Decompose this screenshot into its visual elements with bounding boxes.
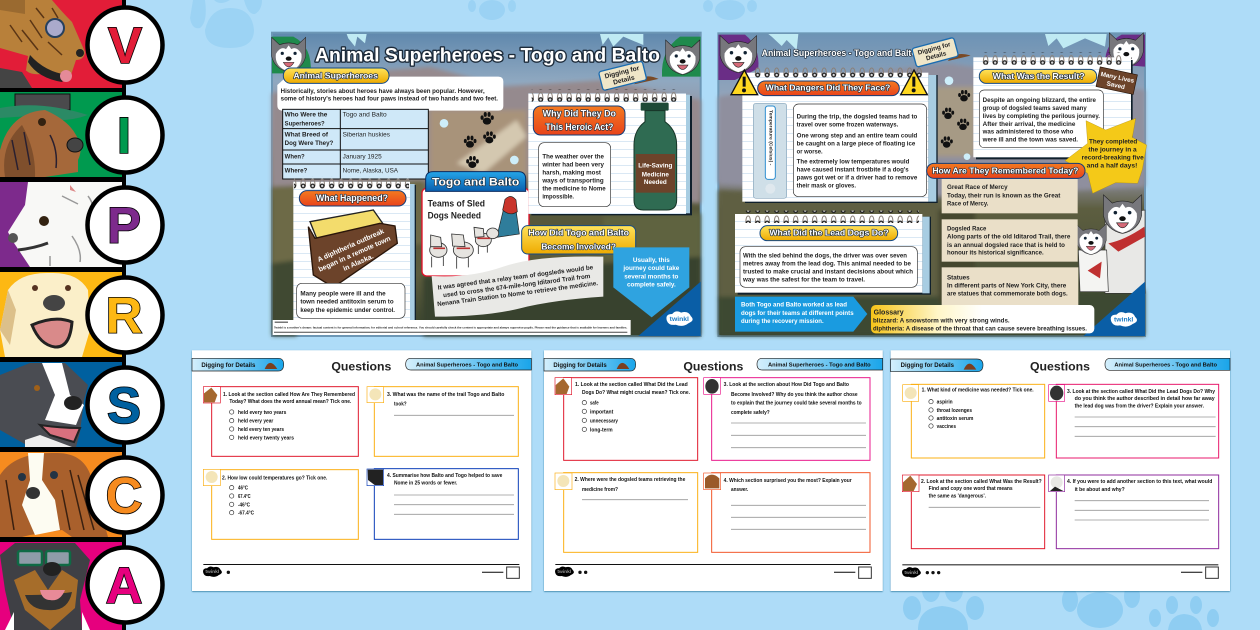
parchment: Statues: In different parts of New York City, there (947, 282, 1067, 289)
text box: have caused instant frostbite if a dog's (797, 166, 909, 173)
text box: harsh, making most (542, 169, 602, 176)
sign: Many Lives Saved (1096, 67, 1137, 94)
intro text box (277, 77, 503, 111)
question 3: 3. Look at the section about How Did Togo and Balto (724, 382, 849, 388)
intro text box: Historically, stories about heroes have always been popular. However, (281, 88, 485, 95)
question 2: 2. How low could temperatures go? Tick one. (222, 475, 328, 481)
star callout: They completed (1089, 138, 1137, 145)
parchment: Dogsled Race: is an annual dogsled race that is held to (947, 242, 1065, 249)
heading (760, 226, 898, 241)
question 4: 4. Summarise how Balto and Togo helped to save (387, 473, 502, 479)
parchment: Statues (942, 267, 1078, 305)
question 1: vaccines (937, 424, 956, 430)
heading (533, 106, 625, 135)
twinkl logo (1111, 312, 1137, 327)
footer (555, 564, 871, 578)
text box: was administered to those who (982, 129, 1073, 136)
star callout: record-breaking five (1082, 154, 1144, 161)
question 4 (704, 473, 870, 552)
letter I: I (117, 107, 131, 164)
footer bar: Twinkl is a mother's dream: factual content is for general information; for editorial and school reference. You should carefully check the content is appropriate and always supervise pupils. Please read the guidance that is available for learners and families. (274, 326, 628, 330)
corner triangle (1083, 282, 1145, 336)
question 3: Become Involved? Why do you think the author chose (731, 392, 858, 398)
husky right (662, 37, 701, 77)
question 1: important (590, 409, 613, 415)
question 1: antitoxin serum (937, 416, 973, 422)
facts table (283, 109, 428, 179)
question 3: the lead dog was from the driver? Explain your answer. (1075, 403, 1204, 409)
heading: This Heroic Act? (545, 122, 614, 132)
icon: medicine chest (308, 210, 397, 287)
arrow callout: dogs for their teams at different points (741, 310, 854, 317)
text box: their mask or gloves. (797, 182, 856, 189)
band: A pink rottweiler (0, 542, 122, 630)
band: S blue collie (0, 362, 122, 447)
letter P: P (107, 197, 141, 254)
heading: Animal Superheroes (283, 68, 389, 83)
question 3: 3. What was the name of the trail Togo and Balto (387, 392, 505, 398)
question 2: 46°C (238, 486, 248, 492)
band: P purple white dog (0, 182, 122, 267)
parchment: Great Race of Mercy (942, 179, 1078, 213)
question 2: 2. Where were the dogsled teams retrieving the (575, 477, 685, 483)
text box: impossible. (542, 193, 574, 200)
glossary: blizzard: A snowstorm with very strong winds. (873, 318, 1010, 325)
icon: thermometer (753, 103, 787, 198)
header left (544, 358, 636, 371)
notebook: What Dangers Did They Face (731, 67, 938, 203)
text box: group of dogsled teams saved many (983, 105, 1087, 112)
heading: Questions: Questions (331, 359, 391, 373)
letter V: V (108, 17, 142, 74)
letter C: C (106, 467, 142, 524)
digging for details sign: Digging for (604, 65, 641, 80)
header left: Digging for Details (553, 363, 607, 369)
question 1: 1. Look at the section called What Did the Lead (575, 382, 688, 388)
card: Togo and Balto (422, 172, 529, 276)
torn paper text: Nenana Train Station to Nome to retrieve the medicine. (437, 280, 599, 308)
text box (793, 104, 927, 197)
text box: After their arrival, the medicine (983, 121, 1076, 128)
digging for details sign (599, 58, 659, 93)
heading: What Happened: What Happened? (316, 193, 388, 203)
torn paper text (432, 256, 603, 317)
facts table: Dog Were They? (285, 140, 333, 147)
torn paper text: used to cross the 674-mile-long Iditarod Trail from (443, 273, 591, 299)
heading: Questions: Questions (1030, 359, 1090, 373)
text box: be caught on a large piece of floating ice (797, 140, 916, 147)
parchment: Great Race of Mercy: Great Race of Mercy (947, 184, 1008, 191)
letter R: R (106, 287, 142, 344)
notebook: What Did the Lead Dogs Do (735, 211, 931, 295)
title: Animal Superheroes - Togo and Balto (762, 48, 917, 58)
glossary: diphtheria: A disease of the throat that can cause severe breathing issues. (873, 326, 1087, 333)
band: R yellow golden dog (0, 272, 122, 357)
question 4: Nome in 25 words or fewer. (394, 481, 458, 487)
callout: usually: Usually, this (633, 257, 670, 264)
parchment: Great Race of Mercy: Race of Mercy. (947, 201, 988, 208)
question 3 (704, 378, 870, 460)
facts table: Superheroes? (285, 121, 325, 128)
sign: Many Lives Saved: Many Lives (1100, 71, 1135, 85)
notebook: Why Did They Do This Heroic Act (528, 89, 692, 215)
text box (740, 247, 917, 287)
letter S (88, 368, 162, 442)
digging for details sign (912, 34, 971, 70)
question 2: -46°C (238, 502, 250, 508)
text box: travel over some frozen waterways. (797, 122, 898, 129)
digging for details sign: Details (613, 74, 636, 87)
text box: winter had been very (541, 161, 604, 168)
parchment: Dogsled Race (942, 219, 1078, 262)
header left (192, 358, 284, 371)
card: Togo and Balto: Teams of Sled (428, 199, 485, 209)
worksheet: questions page 3 (891, 350, 1230, 591)
facts table: Who Were the (285, 112, 328, 119)
paw prints on hill (464, 112, 496, 168)
heading: How Did Togo and Balto Become Involved: How Did Togo and Balto (528, 227, 629, 237)
letter R (88, 278, 162, 352)
question 3: took? (394, 401, 407, 407)
icon: warning right (901, 70, 927, 95)
facts table: Nome, Alaska, USA (343, 168, 399, 175)
heading: How Are They Remembered Today: How Are They Remembered Today? (932, 165, 1078, 175)
icon: medicine bottle: Needed (644, 179, 667, 186)
heading: What Was the Result? (993, 71, 1085, 81)
header right: Animal Superheroes - Togo and Balto (1114, 363, 1218, 369)
question 4: it be about and why? (1075, 487, 1125, 493)
intro text box: some of history's heroes had four paws instead of two hands and two feet. (281, 96, 498, 103)
parchment: Statues: are statues that commemorate both dogs. (947, 291, 1068, 298)
callout: usually: journey could take (622, 265, 680, 272)
question 3: do you think the author described in detail how far away (1075, 396, 1215, 402)
text box: Many people were ill and the (300, 291, 386, 298)
letter P (88, 188, 162, 262)
question 1: 1. Look at the section called How Are They Remembered (223, 392, 355, 398)
sign: Many Lives Saved: Saved (1106, 80, 1126, 91)
digging for details sign: Details (925, 50, 948, 62)
question 1: held every year (238, 419, 274, 425)
question 3 (1049, 384, 1219, 458)
question 1: held every two years (238, 410, 286, 416)
question 1 (555, 378, 698, 460)
twinkl logo (666, 311, 693, 326)
text box (539, 143, 611, 207)
text box: Despite an ongoing blizzard, the entire (983, 97, 1096, 104)
header left: Digging for Details (901, 363, 955, 369)
heading: How Are They Remembered Today (927, 163, 1085, 178)
question 2: medicine from? (582, 487, 618, 493)
text box: One wrong step and an entire team could (797, 132, 917, 139)
text box: With the sled behind the dogs, the driver was over seven (743, 253, 907, 260)
letter A (88, 548, 162, 622)
callout: usually: complete safely. (627, 281, 676, 288)
question 1: throat lozenges (937, 408, 972, 414)
icicles (768, 34, 1107, 50)
letter C (88, 458, 162, 532)
footer (203, 564, 519, 578)
question 1: held every ten years (238, 427, 284, 433)
huskies pulling (1076, 195, 1145, 293)
text box: town needed antitoxin serum to (300, 299, 394, 306)
snow sparkle (945, 76, 970, 160)
question 2 (902, 475, 1045, 549)
letter I (88, 98, 162, 172)
header left: Digging for Details (201, 363, 256, 369)
text box (297, 283, 405, 318)
paw prints (941, 90, 970, 148)
husky left (718, 35, 758, 80)
heading: Animal Superheroes: Animal Superheroes (293, 70, 378, 80)
question 2 (555, 473, 698, 552)
question 4 (367, 469, 518, 539)
icon: medicine bottle: Life-Saving (638, 163, 673, 170)
facts table: Where? (285, 168, 307, 175)
footer bar (273, 320, 631, 335)
card: Togo and Balto: Dogs Needed (428, 210, 481, 220)
question 2: the same as 'dangerous'. (929, 494, 986, 500)
star callout: the journey in a (1088, 146, 1137, 153)
text box: trusted to make crucial and instant decisions about which (743, 269, 913, 276)
parchment: Great Race of Mercy: Today, their run is known as the Great (947, 193, 1061, 200)
title: Animal Superheroes - Togo and Balto (315, 46, 660, 67)
icon: medicine chest: A diphtheria outbreak (317, 228, 385, 264)
letter S: S (107, 377, 141, 434)
arrow callout: during the recovery mission. (741, 318, 824, 325)
text box (979, 90, 1103, 148)
question 1: 1. What kind of medicine was needed? Tick one. (922, 388, 1034, 394)
question 3: 3. Look at the section called What Did the Lead Dogs Do? Why (1067, 389, 1216, 395)
band: C orange spaniel (0, 452, 122, 537)
heading: How Did Togo and Balto Become Involved (522, 226, 636, 254)
panel: poster page one (272, 33, 701, 336)
question 4: 4. Which section surprised you the most? Explain your (724, 478, 852, 484)
heading: How Did Togo and Balto Become Involved: Become Involved? (541, 242, 616, 252)
text box: ways of transporting (541, 177, 604, 184)
question 2 (203, 469, 358, 539)
glossary (871, 305, 1094, 333)
facts table: Siberian huskies (343, 132, 391, 139)
husky left (272, 37, 311, 73)
text box: The weather over the (542, 153, 604, 160)
heading: What Did the Lead Dogs Do? (769, 227, 889, 237)
notebook: What Happened (293, 176, 416, 323)
question 1 (903, 384, 1045, 458)
torn paper text: It was agreed that a relay team of dogsleds would be (437, 264, 594, 292)
question 2: 2. Look at the section called What Was the Result? (921, 479, 1042, 485)
heading: Togo and Balto: Togo and Balto (432, 177, 519, 189)
question 1: unnecessary (590, 419, 619, 425)
star callout: and a half days! (1087, 162, 1137, 169)
icon: warning left (731, 70, 758, 95)
facts table: What Breed of (285, 132, 329, 139)
question 2: -67.4°C (238, 511, 254, 517)
header left (891, 359, 983, 372)
panel: dog letter strip (0, 0, 162, 630)
question 4: answer. (731, 487, 749, 493)
text box: were ill and the town was saved. (982, 136, 1078, 143)
text box: the medicine to Nome (542, 185, 606, 192)
arrow callout: Both Togo and Balto worked as lead (741, 302, 847, 309)
question 1: aspirin (937, 400, 953, 406)
header right: Animal Superheroes - Togo and Balto (416, 363, 519, 369)
header right: Animal Superheroes - Togo and Balto (768, 363, 871, 369)
text box: The extremely low temperatures would (797, 158, 909, 165)
text box: keep the epidemic under control. (300, 307, 395, 314)
question 4: 4. If you were to add another section to this text, what would (1067, 479, 1213, 485)
panel: poster page two (718, 33, 1147, 336)
icon: thermometer: Temperature (Celsius) - (768, 110, 774, 166)
text box: lives by completing the perilous journey. (983, 113, 1100, 120)
band: V red terrier (0, 0, 122, 88)
footer (902, 564, 1218, 578)
heading (979, 69, 1097, 83)
question 1: safe (590, 401, 599, 407)
icon: medicine bottle: Medicine (642, 171, 669, 178)
question 1 (203, 387, 358, 456)
question 1: Dogs Do? What might crucial mean? Tick one. (582, 390, 690, 396)
icon: medicine bottle (634, 103, 677, 210)
parchment: Statues: Statues (947, 274, 970, 281)
star callout (1065, 118, 1147, 193)
facts table: Togo and Balto (343, 112, 387, 119)
text box: or worse. (797, 148, 823, 155)
heading: What Dangers Did They Face? (766, 83, 890, 93)
notebook: What Was the Result (973, 52, 1137, 159)
facts table: January 1925 (343, 153, 382, 160)
digging for details sign: Digging for (917, 41, 952, 57)
facts table: When? (285, 153, 305, 160)
question 1: held every twenty years (238, 435, 294, 441)
header right (406, 358, 531, 370)
heading: Why Did They Do (543, 109, 616, 119)
callout: usually (613, 247, 689, 317)
header right (757, 358, 883, 370)
parchment: Dogsled Race: honour its historical significance. (947, 250, 1044, 257)
snow sparkle (440, 119, 519, 164)
band: I green hound (0, 92, 122, 177)
letter A: A (106, 557, 142, 614)
letter V (88, 8, 162, 82)
question 2: 67.4°C (238, 494, 251, 500)
question 3: to explain that the journey could take several months to (731, 400, 862, 406)
parchment: Dogsled Race: Along parts of the old Iditarod Trail, there (947, 234, 1071, 241)
parchment: Dogsled Race: Dogsled Race (947, 225, 987, 232)
worksheet: questions page 2 (544, 350, 883, 591)
heading (758, 81, 899, 96)
worksheet: questions page 1 (192, 350, 531, 591)
question 4 (1049, 475, 1219, 549)
glossary: Glossary (874, 308, 904, 317)
header right (1105, 358, 1230, 370)
text box: way was the safest for the team to travel. (742, 276, 865, 283)
callout: usually: several months to (624, 273, 679, 280)
husky right (1105, 33, 1145, 67)
text box: paws got wet or if a driver had to remove (797, 175, 918, 182)
question 3 (367, 387, 518, 456)
icon: medicine chest: in Alaska. (342, 253, 375, 273)
question 2: Find and copy one word that means (929, 486, 1013, 492)
icon: musher and sled dogs (430, 196, 519, 269)
icicles (347, 34, 643, 47)
text box: metres away from the lead dog. This animal needed to be (743, 261, 911, 268)
text box: During the trip, the dogsled teams had to (797, 113, 917, 120)
heading: What Happened (299, 191, 406, 206)
icon: medicine chest: began in a remote town (318, 235, 392, 274)
heading: Questions: Questions (683, 359, 743, 373)
corner triangle (638, 282, 701, 336)
question 1: long-term (590, 427, 613, 433)
question 1: Today? What does the word annual mean? Tick one. (229, 399, 352, 405)
arrow callout (735, 297, 867, 332)
question 3: complete safely? (731, 410, 770, 416)
